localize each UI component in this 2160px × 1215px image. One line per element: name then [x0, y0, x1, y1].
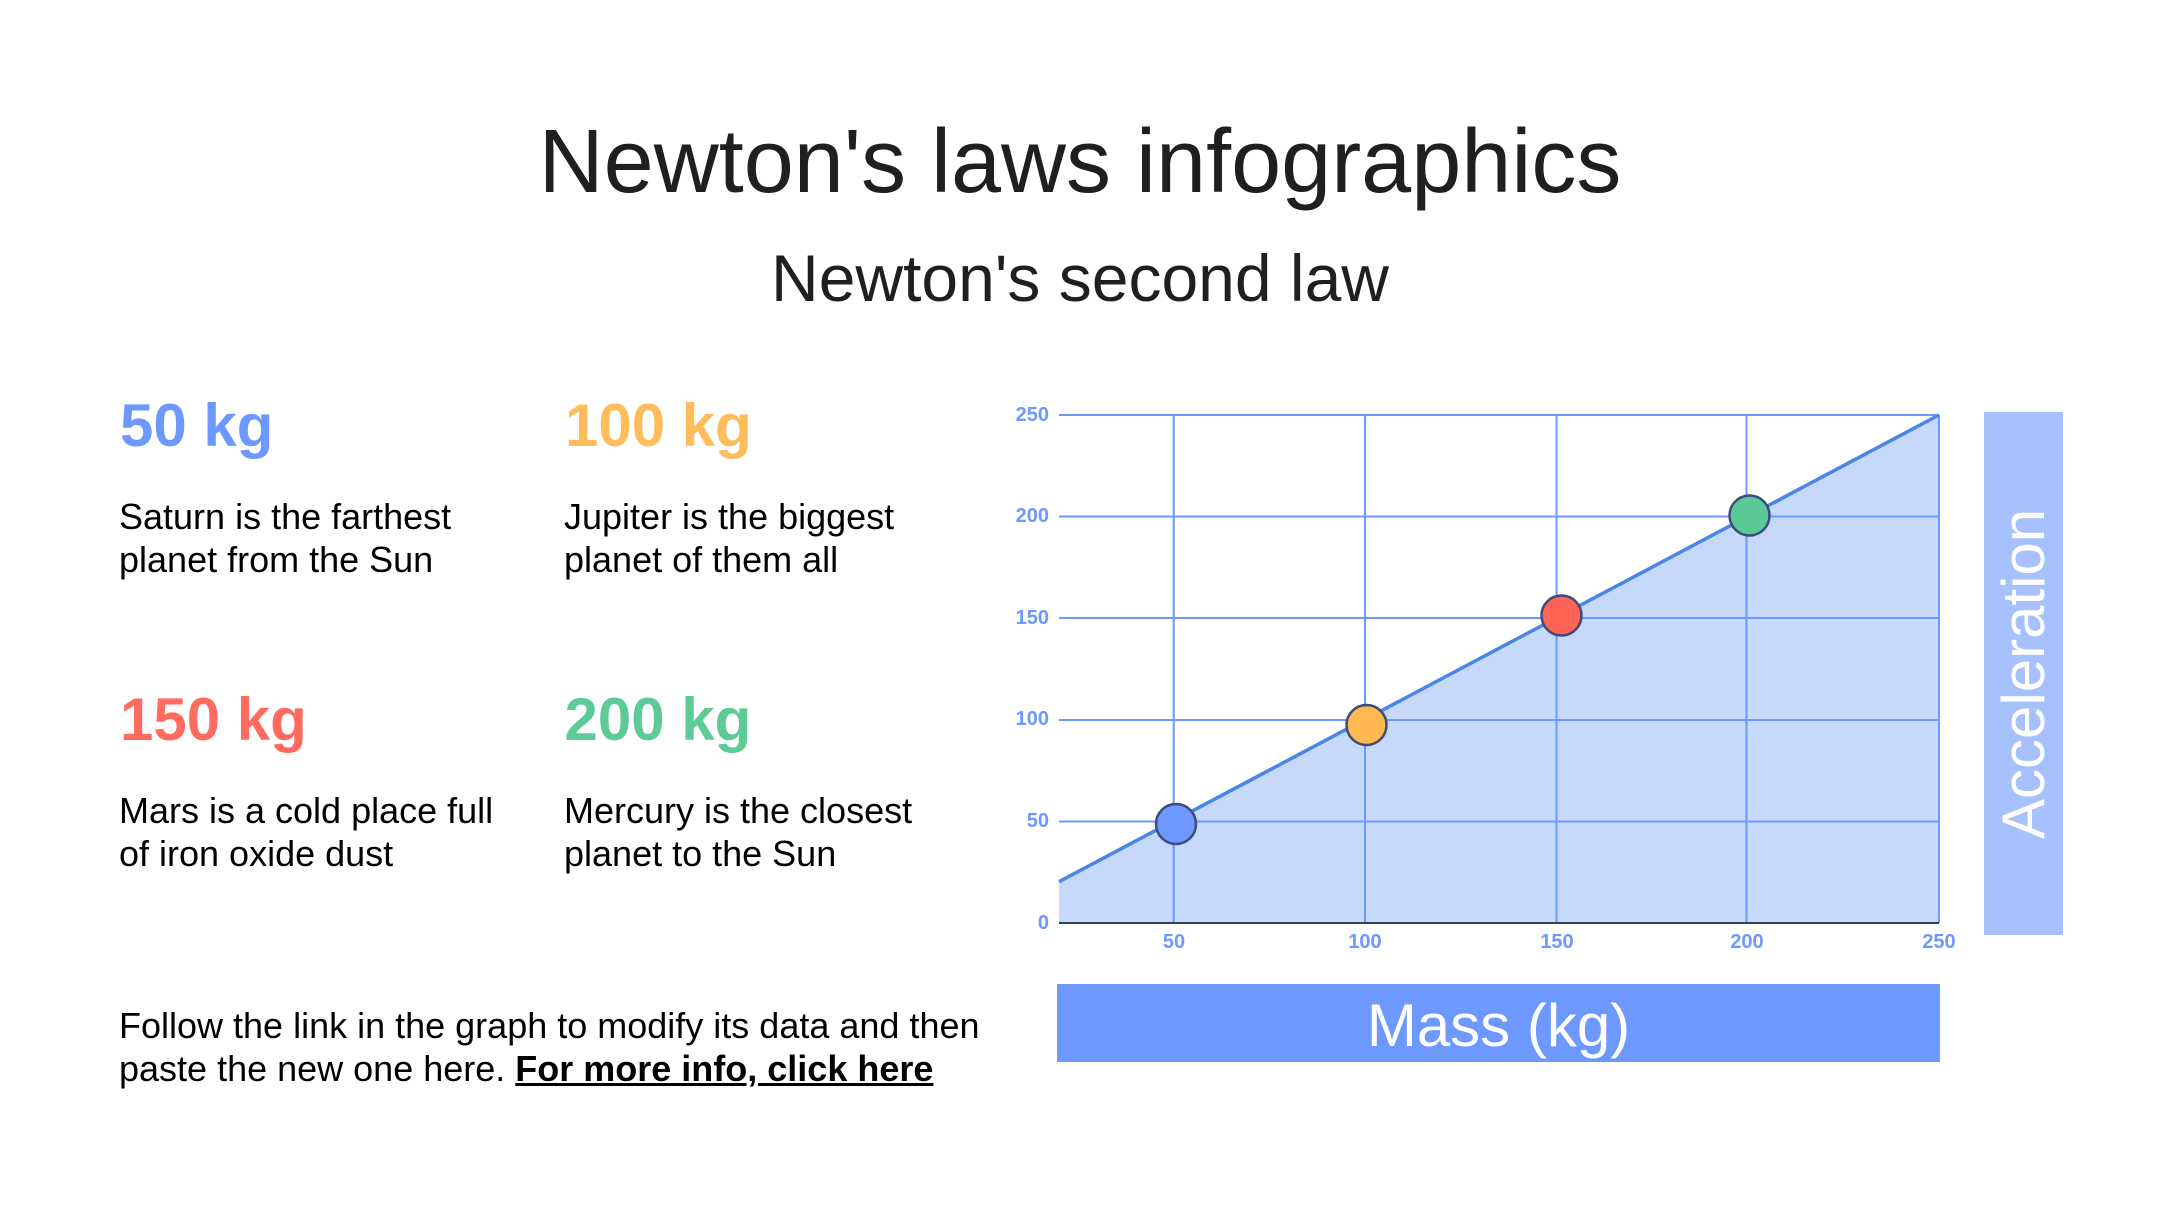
- y axis labels: 150: [1016, 607, 1049, 629]
- text: footer note: paste the new one here. For more info, click here: [119, 1048, 933, 1089]
- grid lines: [1059, 415, 1939, 923]
- x axis labels: 250: [1922, 931, 1956, 953]
- text: Mars: [119, 790, 493, 874]
- axis baseline: [1059, 922, 1939, 924]
- text: Mars: of iron oxide dust: [119, 833, 393, 874]
- y axis label text: Acceleration: [1990, 509, 2057, 839]
- text: Saturn: [119, 496, 451, 580]
- text: Mars: Mars is a cold place full: [119, 790, 493, 831]
- x axis labels: 200: [1730, 931, 1764, 953]
- text: footer note: [119, 1005, 980, 1089]
- x axis label bar: Mass (kg): [1367, 992, 1630, 1058]
- x axis label bar: [1057, 984, 1940, 1062]
- text: Jupiter: [564, 496, 894, 580]
- subtitle: Newton's second law: [771, 241, 1389, 315]
- text: Mercury: [564, 790, 912, 874]
- title: Newton's laws infographics: [539, 112, 1621, 212]
- point: 100 kg: [1346, 705, 1386, 745]
- heading: 200 kg: 200 kg: [564, 686, 751, 753]
- y axis labels: 200: [1016, 505, 1049, 527]
- text: Jupiter: planet of them all: [564, 538, 838, 580]
- x axis labels: 100: [1348, 931, 1382, 953]
- heading: 50 kg: 50 kg: [120, 392, 273, 459]
- point: 50 kg: [1156, 804, 1196, 844]
- x axis labels: [1163, 931, 1956, 953]
- y axis labels: [1016, 404, 1049, 934]
- text: Saturn: Saturn is the farthest: [119, 496, 451, 536]
- y axis labels: 250: [1016, 404, 1049, 426]
- x axis labels: 150: [1540, 931, 1574, 953]
- text: footer note: Follow the link in the graph to modify its data and then: [119, 1005, 980, 1046]
- point: 200 kg: [1730, 496, 1770, 536]
- text: Mercury: planet to the Sun: [564, 833, 836, 874]
- heading: 150 kg: 150 kg: [120, 686, 307, 753]
- heading: 100 kg: 100 kg: [565, 392, 752, 459]
- text: Mercury: Mercury is the closest: [564, 790, 912, 831]
- y axis labels: 0: [1038, 912, 1049, 934]
- text: Saturn: planet from the Sun: [119, 538, 433, 580]
- point: 150 kg: [1542, 596, 1582, 636]
- y axis label bar: [1984, 412, 2063, 935]
- area fill: [1059, 415, 1939, 923]
- trend line: [1059, 415, 1939, 882]
- text: Jupiter: Jupiter is the biggest: [564, 496, 894, 536]
- y axis labels: 100: [1016, 708, 1049, 730]
- x axis labels: 50: [1163, 931, 1185, 953]
- y axis labels: 50: [1027, 810, 1049, 832]
